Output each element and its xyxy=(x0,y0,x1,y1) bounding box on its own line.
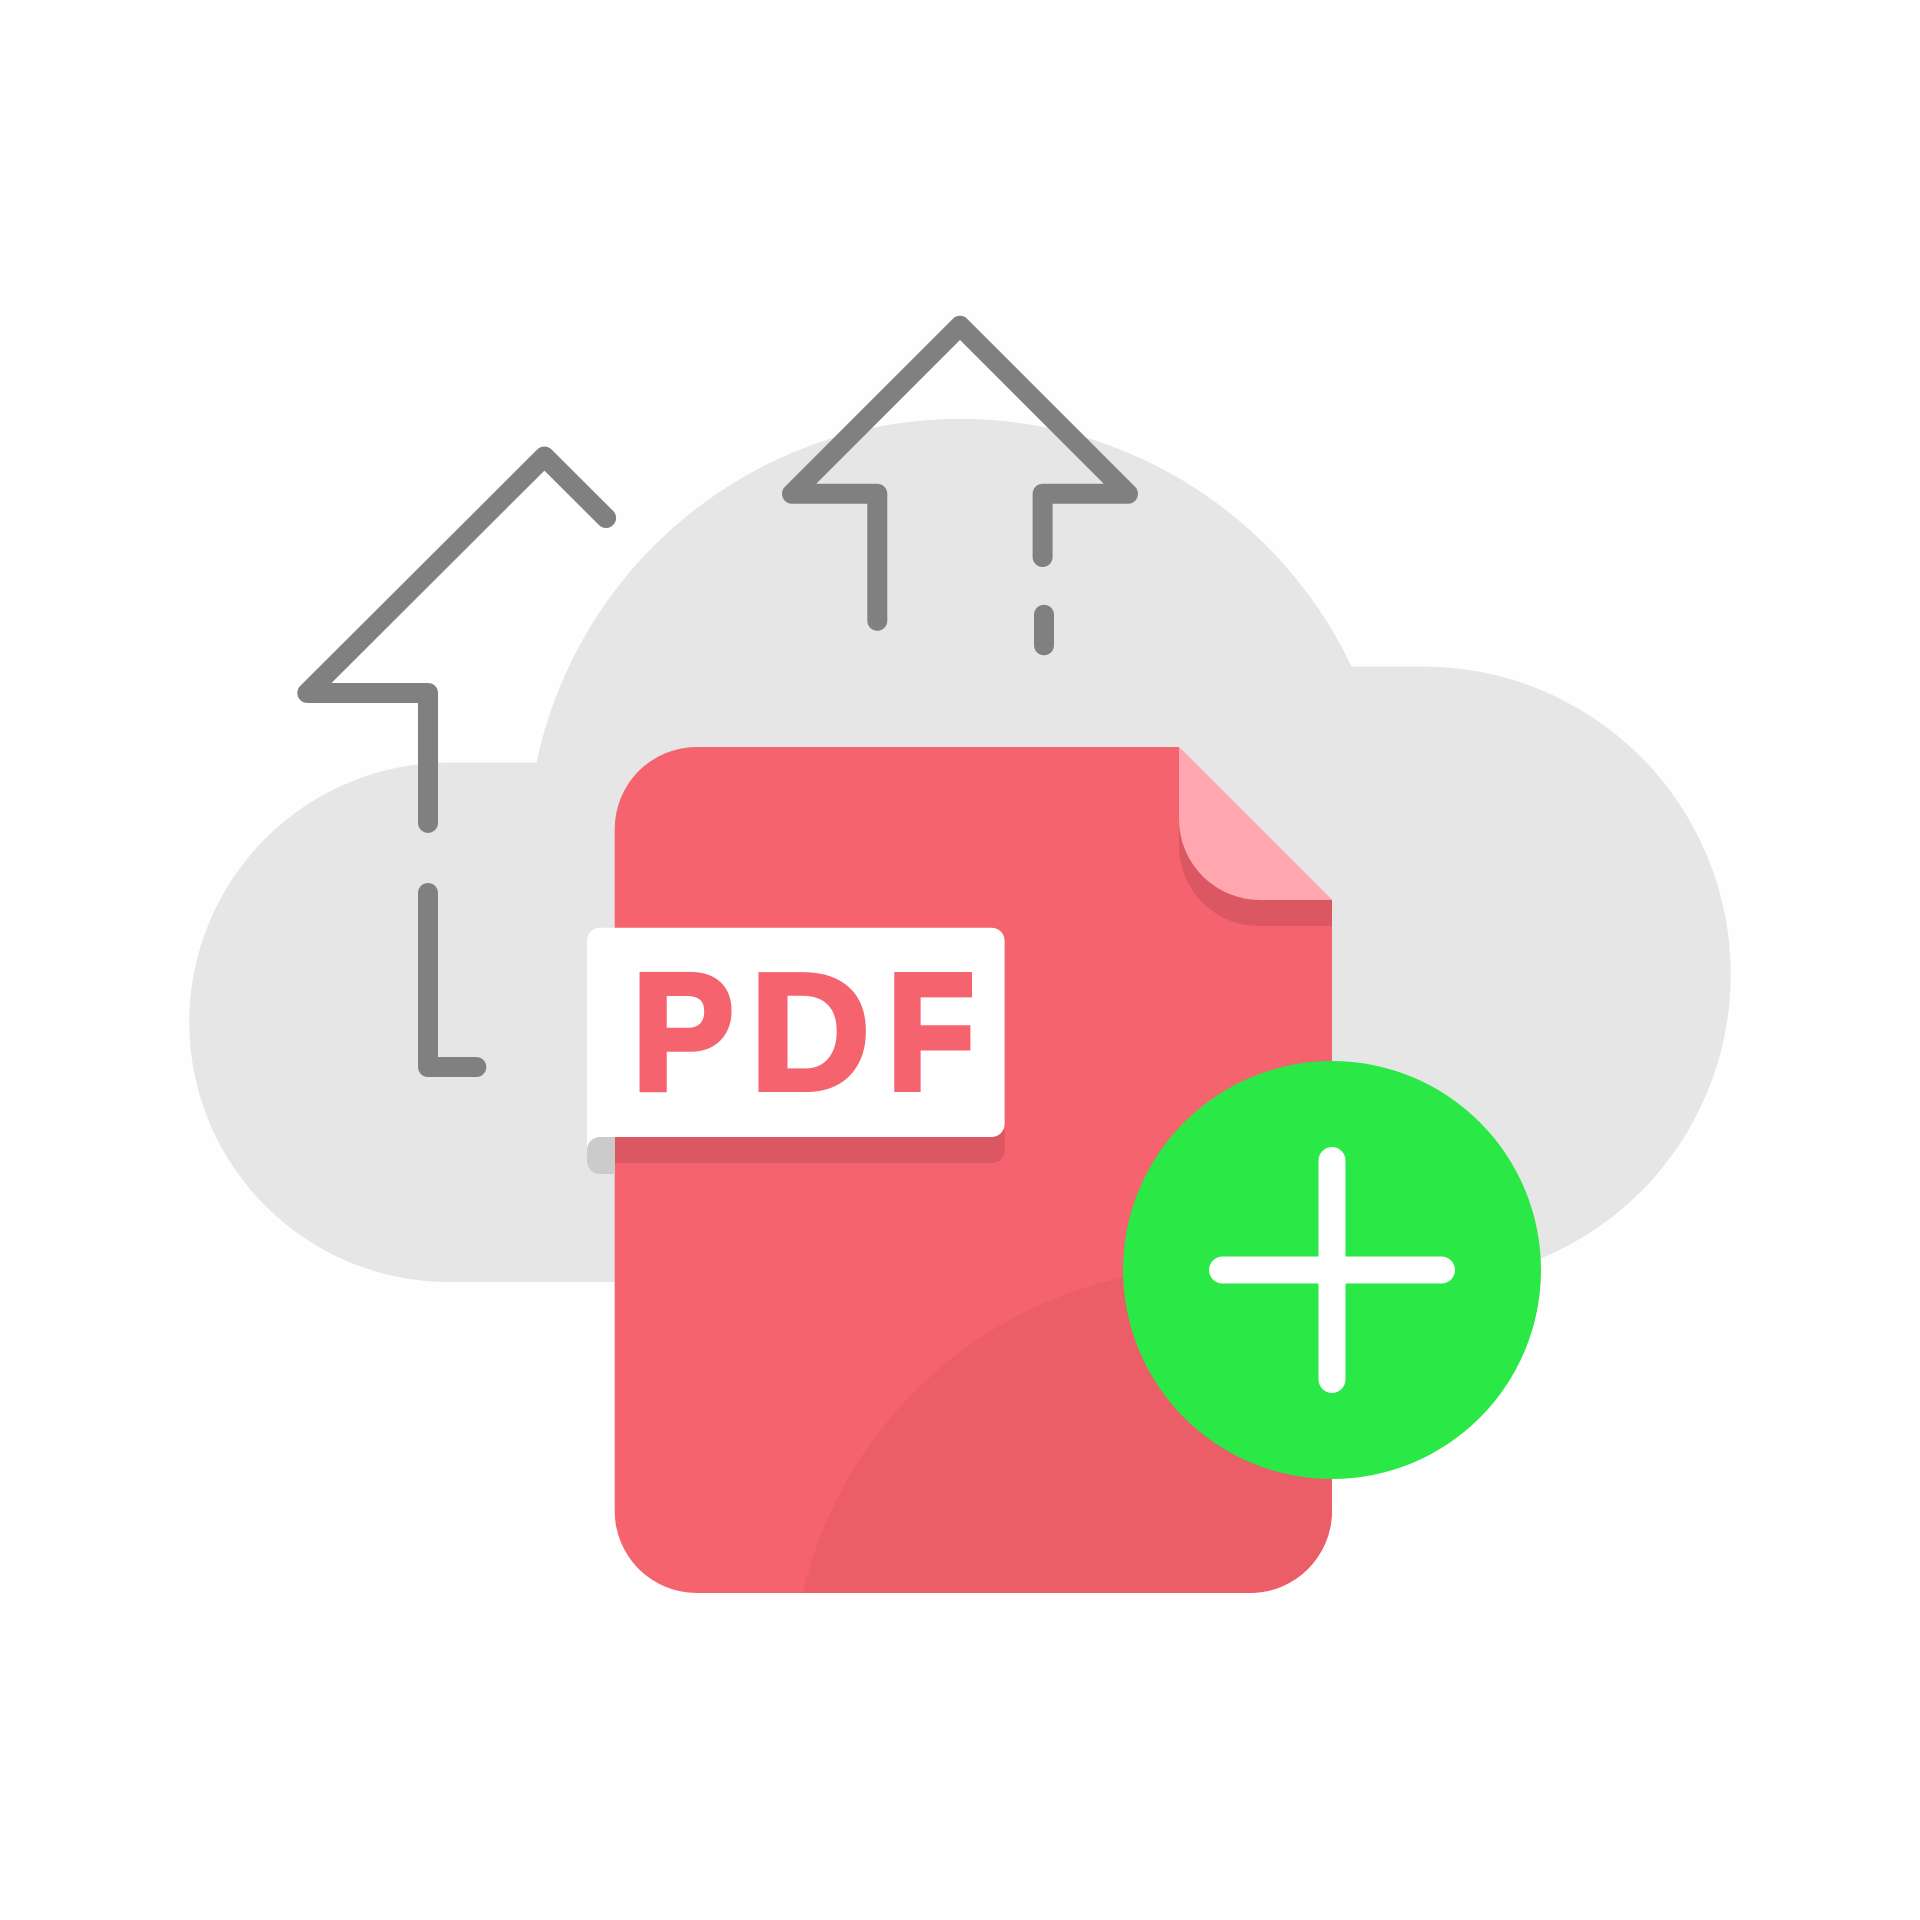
plus sign xyxy=(1222,1160,1442,1380)
folded corner shadow xyxy=(1179,820,1332,926)
label text PDF: P xyxy=(632,940,734,1126)
label text PDF xyxy=(632,940,974,1126)
green add badge xyxy=(1123,1061,1541,1479)
label shadow on document xyxy=(615,1130,1005,1163)
PDF label xyxy=(587,928,1005,1174)
label rolled shadow on cloud xyxy=(587,1137,615,1174)
badge circle xyxy=(1123,1061,1541,1479)
cloud xyxy=(189,419,1731,1282)
arrow: right upload arrow xyxy=(792,326,1128,645)
document xyxy=(615,747,1332,1593)
folded corner xyxy=(1179,747,1332,900)
document body xyxy=(615,747,1332,1593)
document lower shade xyxy=(803,1268,1332,1593)
label text PDF: D xyxy=(750,940,870,1126)
arrow: left upload arrow xyxy=(307,456,606,1067)
label text PDF: F xyxy=(888,941,974,1124)
label white band xyxy=(587,928,1005,1155)
